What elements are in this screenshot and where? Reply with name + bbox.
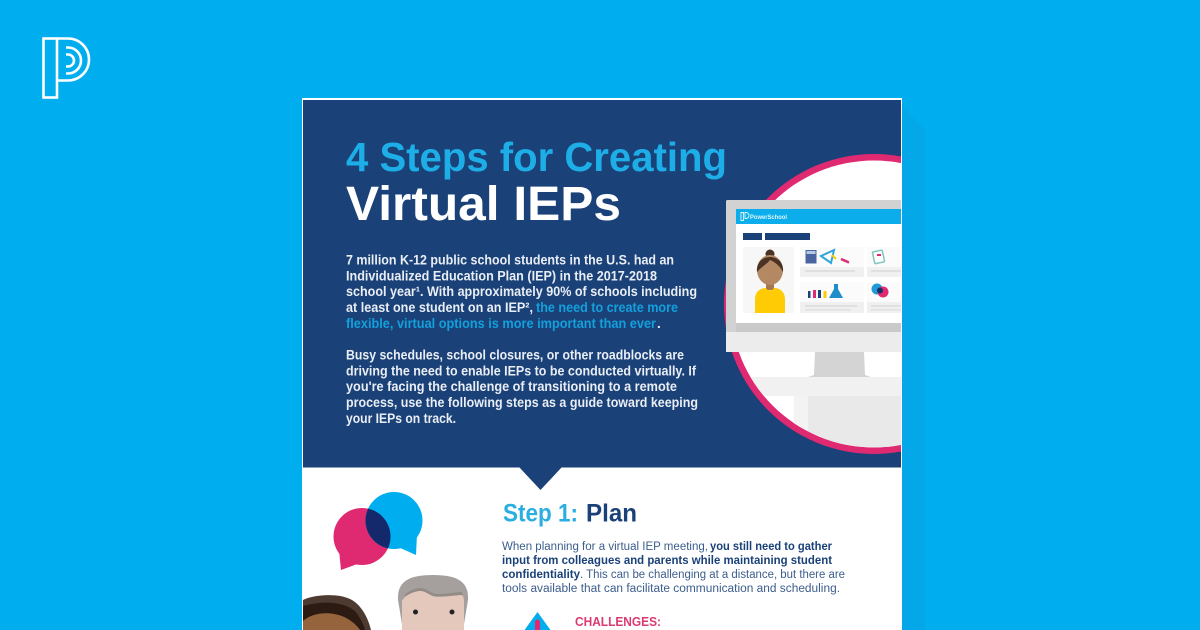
icon: calculator and rulers xyxy=(806,250,849,264)
step 1 body text: input from colleagues and parents while maintaining student xyxy=(502,555,832,567)
intro paragraph 2: driving the need to enable IEPs to be conducted virtually. If xyxy=(346,364,696,378)
icon: note card xyxy=(872,250,885,264)
screen title bars xyxy=(743,233,762,240)
intro paragraph 1: school year¹. With approximately 90% of schools including xyxy=(346,284,697,299)
icon: warning triangle xyxy=(524,612,550,630)
intro paragraph 1 xyxy=(346,252,697,331)
intro paragraph 1: Individualized Education Plan (IEP) in the 2017-2018 xyxy=(346,268,657,284)
pink circle backdrop xyxy=(724,154,901,454)
student card xyxy=(755,250,785,313)
panel: navy header xyxy=(303,100,901,490)
document page xyxy=(302,98,902,630)
intro paragraph 2: you're facing the challenge of transitioning to a remote xyxy=(346,379,677,394)
step 1 body text xyxy=(502,541,845,595)
illustration: left person xyxy=(303,595,371,630)
illustration: right person xyxy=(398,575,468,630)
icon: speech bubbles xyxy=(872,284,888,298)
illustration: monitor: PowerSchool xyxy=(750,214,787,221)
logo xyxy=(44,38,89,98)
document shadow xyxy=(901,104,925,630)
step 1 body text: tools available that can facilitate communication and scheduling. xyxy=(502,583,840,595)
intro paragraph 1: flexible, virtual options is more important than ever xyxy=(346,316,657,331)
icon: test tubes and flask xyxy=(808,284,843,298)
illustration: monitor xyxy=(726,200,902,377)
screen header xyxy=(736,209,902,224)
intro paragraph 2: Busy schedules, school closures, or other roadblocks are xyxy=(346,348,684,362)
pointer arrow xyxy=(519,467,562,490)
step 1 body text: you still need to gather xyxy=(710,541,832,553)
intro paragraph 1: at least one student on an IEP², xyxy=(346,300,533,315)
title: 4 Steps for Creating xyxy=(346,134,727,180)
intro paragraph 2: your IEPs on track. xyxy=(346,411,456,426)
step 1 body text: confidentiality xyxy=(502,569,581,581)
step 1 body text: When planning for a virtual IEP meeting, xyxy=(502,541,708,553)
illustration: desk xyxy=(750,377,901,448)
title xyxy=(346,134,727,231)
icon: speech bubbles xyxy=(334,492,422,570)
step 1 heading xyxy=(503,500,637,528)
tile labels xyxy=(800,267,902,313)
intro paragraph 2: process, use the following steps as a guide toward keeping xyxy=(346,395,698,410)
intro paragraph 1: 7 million K-12 public school students in the U.S. had an xyxy=(346,252,674,268)
intro paragraph 2 xyxy=(346,348,698,426)
step 1 heading: Plan xyxy=(586,500,637,528)
challenges label: CHALLENGES: xyxy=(575,614,661,629)
intro paragraph 1: the need to create more xyxy=(536,300,678,315)
intro paragraph 1: . xyxy=(657,316,661,331)
step 1 body text: . This can be challenging at a distance, but there are xyxy=(580,569,845,581)
step 1 heading: Step 1: xyxy=(503,500,578,528)
tile cards xyxy=(800,247,902,302)
title: Virtual IEPs xyxy=(346,178,621,231)
